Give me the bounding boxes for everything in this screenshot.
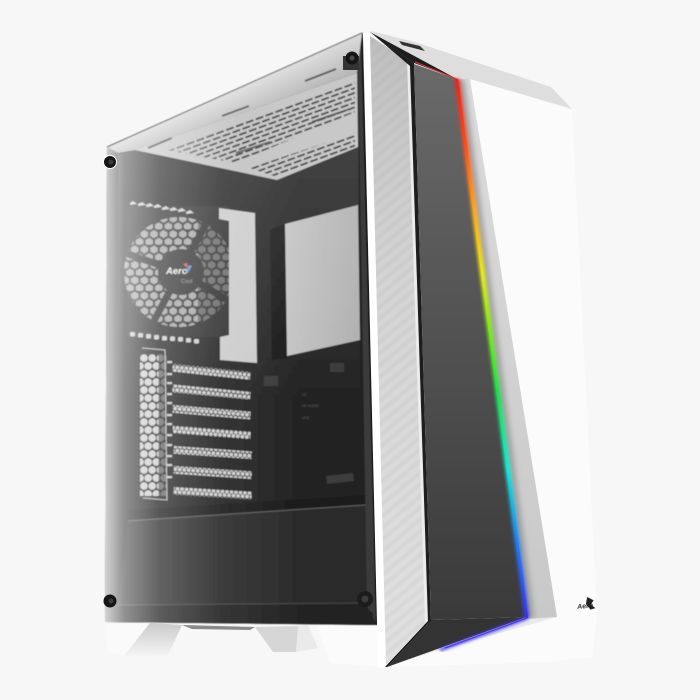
- drive bay plate: [285, 205, 360, 356]
- vents below fan: [130, 332, 199, 344]
- front logo: Aero: [576, 602, 594, 611]
- white cable bar: [219, 208, 257, 363]
- facet shadow beside strip: [461, 79, 531, 618]
- thumb screw top right: [343, 52, 359, 70]
- PCI slot vents: [172, 364, 252, 499]
- top facet: [371, 31, 572, 109]
- panel: tempered glass side with interior: [105, 33, 378, 625]
- PCI brackets: [167, 361, 172, 478]
- illustration: white PC tower case with tempered glass and RGB strip: [104, 31, 596, 667]
- dark mesh panel: [414, 64, 527, 620]
- drive bay surround: [270, 224, 287, 360]
- white right face: [388, 79, 597, 667]
- front base white corner: [316, 624, 387, 667]
- panel: front fascia: [363, 31, 597, 668]
- black seam: [369, 31, 431, 622]
- glass white fade overlays: [105, 33, 377, 625]
- carbon textured strip: [370, 36, 428, 665]
- vents above fan: [130, 201, 194, 214]
- rear foot: [255, 625, 318, 652]
- fan logo mark: [183, 263, 192, 273]
- top notch button: [399, 41, 425, 51]
- under-case shadow: [182, 625, 255, 630]
- fan hub: [158, 249, 204, 295]
- motherboard tray details: I/O: [302, 393, 307, 397]
- thumb screw bottom right: [357, 591, 373, 619]
- glass bottom frame: [105, 603, 377, 625]
- bottom facet shadow: [400, 617, 557, 662]
- motherboard tray details: USB: [302, 416, 310, 420]
- RGB light strip: [415, 62, 527, 650]
- glass base: [105, 33, 377, 625]
- fan: Cool: [181, 279, 192, 285]
- top edge line: [107, 33, 362, 147]
- top mesh plate: [135, 68, 358, 180]
- PSU shroud: [118, 495, 372, 606]
- white edge strip: [363, 32, 387, 668]
- front logo: [575, 596, 595, 611]
- fan: [124, 200, 230, 344]
- glass right frame: [358, 33, 377, 625]
- left foot: [105, 622, 182, 657]
- expansion area: side hex vent: [140, 348, 167, 500]
- lower chamfer dark: [387, 617, 527, 667]
- thumb screw top left: [103, 155, 117, 169]
- grey side facet next to light strip: [457, 79, 557, 619]
- top glass frame band: [107, 33, 362, 153]
- fan logo text: Aero: [165, 266, 188, 277]
- fan grille hexes: [124, 216, 229, 328]
- motherboard tray details: HD AUDIO: [302, 404, 319, 408]
- thumb screw bottom left: [104, 594, 116, 608]
- top chamfer dark: [370, 32, 457, 79]
- fan frame: [127, 206, 231, 337]
- motherboard tray details: [264, 363, 354, 484]
